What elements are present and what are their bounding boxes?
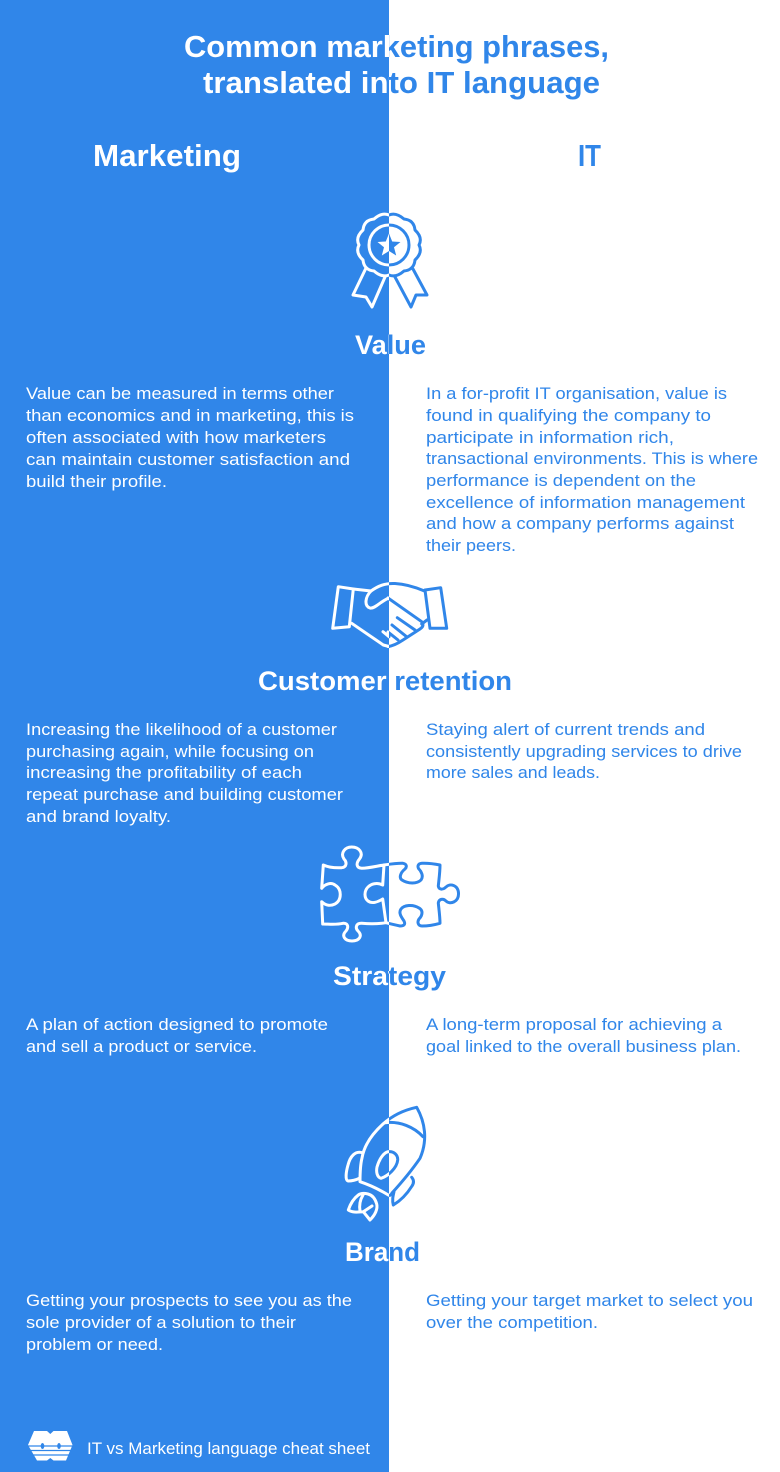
title: Common marketing phrases, xyxy=(184,29,609,64)
column heading: IT: IT xyxy=(578,138,601,173)
text: Brand marketing definition xyxy=(26,1291,352,1354)
text: Value IT definition: participate in information rich, xyxy=(426,428,674,447)
text: Customer retention marketing definition: Increasing the likelihood of a customer xyxy=(26,720,337,739)
icon: award rosette xyxy=(353,214,427,307)
text: Value marketing definition: Value can be measured in terms other xyxy=(26,384,334,403)
text: Strategy marketing definition: A plan of action designed to promote xyxy=(26,1015,328,1034)
section: Strategy xyxy=(26,847,741,1056)
text: Customer retention marketing definition: repeat purchase and building customer xyxy=(26,785,343,804)
text: Brand marketing definition: sole provider of a solution to their xyxy=(26,1313,296,1332)
icon: company logo xyxy=(28,1431,73,1460)
text: Value IT definition: In a for-profit IT organisation, value is xyxy=(426,384,727,403)
title xyxy=(184,29,609,100)
text: Value IT definition: performance is dependent on the xyxy=(426,471,696,490)
text: Brand marketing definition: problem or need. xyxy=(26,1335,163,1354)
text: Value marketing definition xyxy=(26,384,354,491)
text: Customer retention IT definition: more sales and leads. xyxy=(426,763,600,782)
section: Brand xyxy=(26,1107,753,1354)
text: Strategy IT definition: A long-term proposal for achieving a xyxy=(426,1015,723,1034)
text: Strategy IT definition xyxy=(426,1015,741,1056)
text: Customer retention IT definition xyxy=(426,720,742,782)
heading: Brand: Brand xyxy=(345,1237,420,1267)
text: Customer retention IT definition: Staying alert of current trends and xyxy=(426,720,705,739)
heading: Strategy: Strategy xyxy=(333,961,446,991)
text: Value IT definition: their peers. xyxy=(426,536,516,555)
section: Customer retention xyxy=(26,583,742,826)
icon: jigsaw pieces xyxy=(322,847,459,941)
text: Value marketing definition: build their profile. xyxy=(26,472,167,491)
text: Brand IT definition: Getting your target market to select you xyxy=(426,1291,753,1310)
text: Brand IT definition: over the competition. xyxy=(426,1313,598,1332)
title: translated into IT language xyxy=(203,65,600,100)
text: Value IT definition: and how a company performs against xyxy=(426,514,734,533)
text: Value IT definition xyxy=(426,384,758,555)
text: Value IT definition: transactional environments. This is where xyxy=(426,449,758,468)
text: Strategy marketing definition: and sell a product or service. xyxy=(26,1037,257,1056)
icon: rocket xyxy=(346,1107,425,1220)
text: Brand marketing definition: Getting your prospects to see you as the xyxy=(26,1291,352,1310)
column heading: Marketing: Marketing xyxy=(93,138,241,173)
footer xyxy=(28,1431,370,1460)
text: Strategy IT definition: goal linked to the overall business plan. xyxy=(426,1037,741,1056)
heading: Customer retention: Customer retention xyxy=(258,666,512,696)
text: Value IT definition: excellence of information management xyxy=(426,493,745,512)
text: Customer retention IT definition: consistently upgrading services to drive xyxy=(426,742,742,761)
text: Strategy marketing definition xyxy=(26,1015,328,1056)
blue marketing half background xyxy=(0,0,389,1472)
text: Value marketing definition: than economics and in marketing, this is xyxy=(26,406,354,425)
icon: handshake xyxy=(333,583,447,646)
text: Value marketing definition: often associated with how marketers xyxy=(26,428,326,447)
text: Customer retention marketing definition: purchasing again, while focusing on xyxy=(26,742,314,761)
section: Value xyxy=(26,214,758,555)
text: Customer retention marketing definition: increasing the profitability of each xyxy=(26,763,302,782)
text: Value marketing definition: can maintain customer satisfaction and xyxy=(26,450,350,469)
text: footer caption: IT vs Marketing language cheat sheet xyxy=(87,1439,370,1458)
text: Value IT definition: found in qualifying the company to xyxy=(426,406,711,425)
text: Brand IT definition xyxy=(426,1291,753,1332)
text: Customer retention marketing definition: and brand loyalty. xyxy=(26,807,171,826)
text: Customer retention marketing definition xyxy=(26,720,343,826)
heading: Value: Value xyxy=(355,330,426,360)
